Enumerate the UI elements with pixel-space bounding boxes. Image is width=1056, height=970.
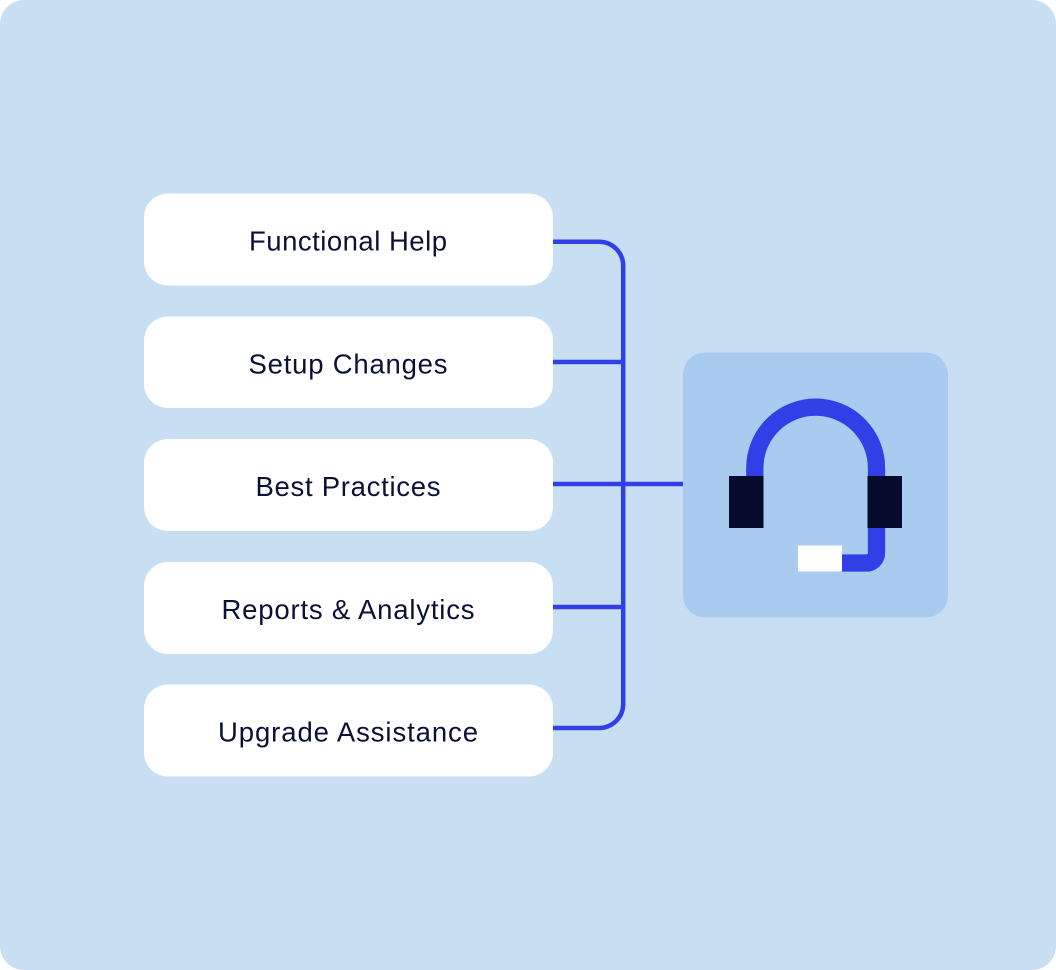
card: Upgrade Assistance [144, 684, 553, 776]
panel: headset icon tile [683, 352, 948, 618]
microphone [798, 546, 842, 572]
connector lines [553, 242, 683, 728]
card: Functional Help [144, 194, 553, 286]
left ear cup [729, 476, 764, 528]
card: Reports & Analytics: Reports & Analytics [222, 594, 474, 625]
right ear cup [868, 476, 902, 528]
card: Functional Help: Functional Help [249, 226, 447, 256]
card: Setup Changes [144, 316, 553, 408]
card: Upgrade Assistance: Upgrade Assistance [218, 716, 478, 748]
icon: headset [729, 407, 902, 572]
microphone boom [840, 526, 876, 563]
headband [755, 407, 876, 478]
card: Best Practices: Best Practices [256, 471, 440, 502]
card: Best Practices [144, 439, 553, 531]
card: Setup Changes: Setup Changes [248, 348, 448, 380]
card: Reports & Analytics [144, 562, 553, 654]
